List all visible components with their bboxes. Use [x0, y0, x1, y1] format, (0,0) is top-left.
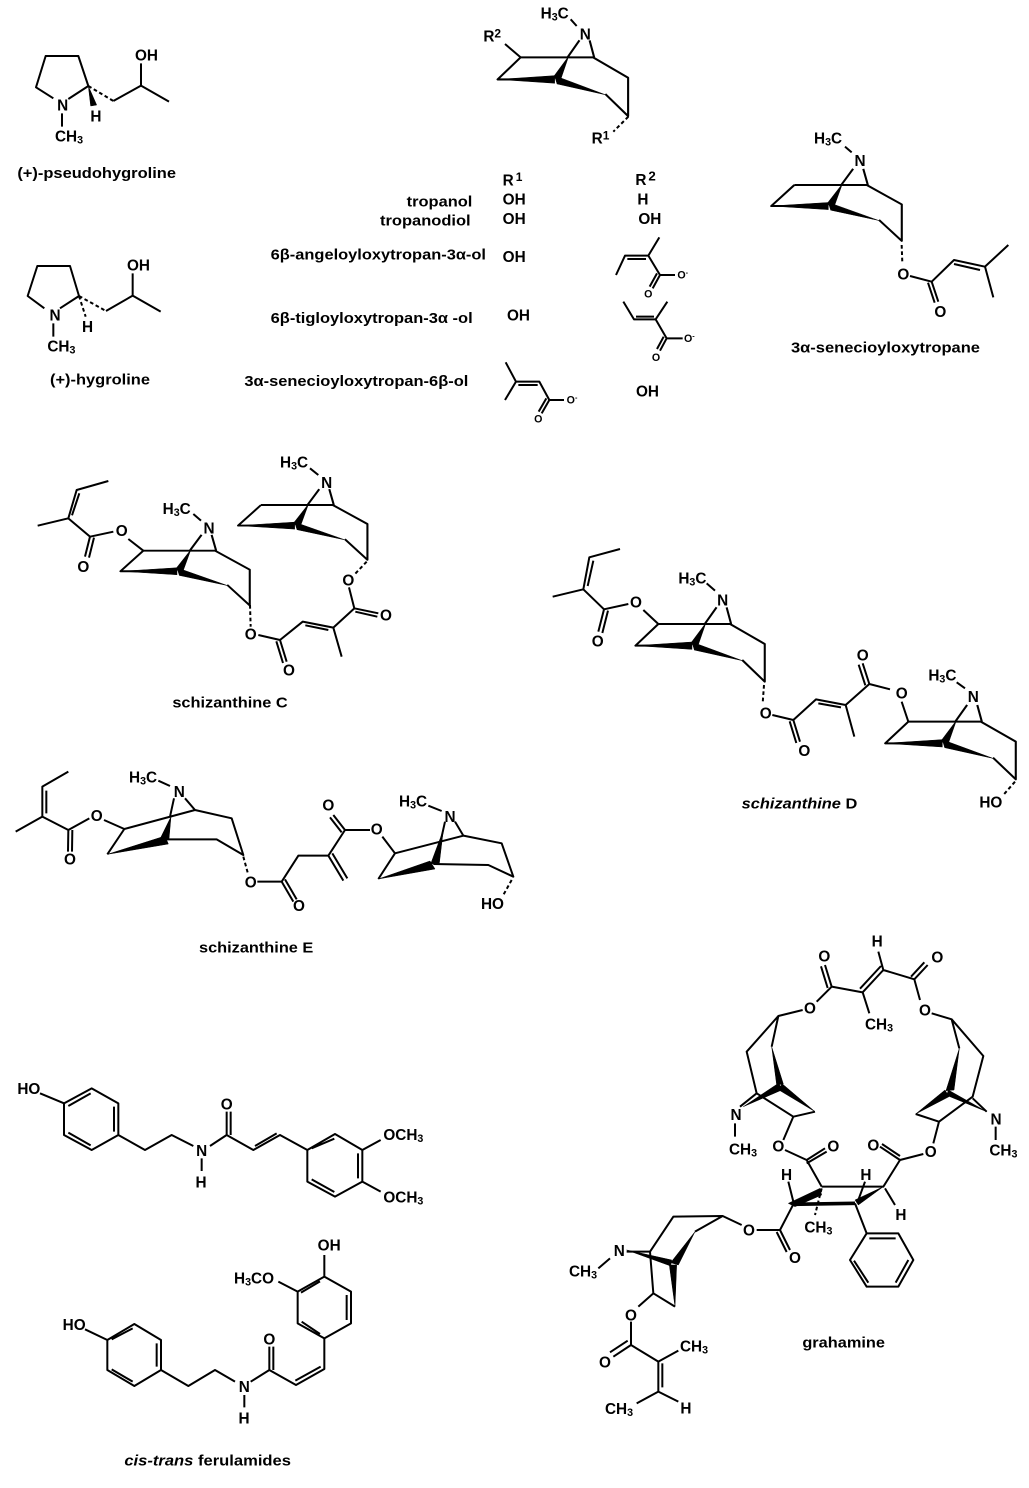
atom: H3C: 3	[939, 674, 945, 686]
atom: O: O	[599, 1355, 611, 1372]
atom labels	[64, 770, 504, 915]
oxygen anion: O	[677, 269, 686, 281]
atom labels	[77, 454, 392, 679]
row name: tropanol: tropanol	[407, 194, 472, 210]
atom: H3C: 3	[291, 460, 297, 472]
atom: H3C: H	[163, 501, 174, 518]
atom: H3C: C	[146, 770, 157, 787]
atom: H3C: C	[558, 5, 569, 22]
atom: O: O	[931, 950, 943, 967]
hashed bond	[899, 245, 905, 263]
atom: H: H	[680, 1401, 691, 1418]
bonds	[616, 237, 675, 288]
scaffold bonds	[498, 40, 628, 116]
atom: O: O	[925, 1144, 937, 1161]
wedge	[947, 1090, 987, 1112]
atom: CH3: 3	[627, 1407, 633, 1419]
bonds	[85, 1255, 351, 1407]
atom: H3C: H	[129, 770, 140, 787]
oxygen anion: -	[692, 332, 695, 341]
atom: O: O	[380, 607, 392, 624]
cell: OH: OH	[503, 191, 526, 208]
atom: O: O	[221, 1097, 233, 1114]
atom: O: O	[804, 1001, 816, 1018]
atom: O: O	[789, 1250, 801, 1267]
wedge	[627, 1250, 672, 1266]
carbonyl oxygen: O	[652, 352, 660, 364]
atom: N: N	[614, 1243, 625, 1260]
atom: H3C: C	[831, 130, 842, 147]
atom: CH3: 3	[702, 1345, 708, 1357]
carbonyl oxygen: O	[644, 289, 652, 301]
atom: CH3: CH	[989, 1142, 1011, 1159]
atom: H3C: 3	[174, 507, 180, 519]
bonds	[36, 56, 169, 127]
bonds	[598, 952, 996, 1403]
atom: N: N	[196, 1143, 207, 1160]
R2 bond	[505, 19, 577, 57]
atom: OH: OH	[127, 258, 150, 275]
atom: H3C: C	[297, 454, 308, 471]
atom: ester O: O	[897, 266, 909, 283]
name: pseudohygroline: (+)-pseudohygroline	[17, 166, 176, 182]
cell: OH: OH	[636, 384, 659, 401]
table acyl groups	[505, 237, 695, 426]
atom: O: O	[293, 898, 305, 915]
atom: H3C: H	[280, 454, 291, 471]
oxygen anion: O	[684, 333, 692, 345]
atom: carbonyl O: O	[934, 304, 946, 321]
hashed bond	[815, 1188, 822, 1215]
atom: R1: 1	[603, 128, 610, 142]
atom: O: O	[322, 797, 334, 814]
row name: senecioyloxytropanol: 3α-senecioyloxytropan-6β-ol	[244, 374, 468, 390]
atom: N: N	[203, 521, 215, 538]
atom: O: O	[896, 686, 908, 703]
atom labels	[17, 1081, 423, 1207]
atom: CH3: CH	[865, 1016, 887, 1033]
atom: H: H	[860, 1167, 871, 1184]
row name: angeloyloxytropanol: 6β-angeloyloxytropan-3α-ol	[271, 248, 486, 264]
oxygen anion: -	[686, 268, 689, 277]
angeloyl group	[616, 237, 689, 301]
carbonyl oxygen: O	[534, 414, 542, 426]
atom: H3C: H	[814, 130, 825, 147]
atom: OCH3: 3	[417, 1133, 423, 1145]
atom: O: O	[919, 1002, 931, 1019]
atom labels	[63, 1238, 341, 1427]
atom: O: O	[760, 706, 772, 723]
atom: O: O	[772, 1138, 784, 1155]
atom: N: N	[968, 689, 979, 706]
atom: N: N	[990, 1112, 1002, 1129]
bonds	[505, 362, 564, 413]
molecule: trans ferulamide	[17, 1081, 423, 1207]
atom: HO: HO	[481, 896, 504, 913]
atom: O: O	[827, 1138, 839, 1155]
atom: O: O	[371, 822, 383, 839]
atom: O: O	[630, 595, 642, 612]
atom: CH3: CH	[569, 1264, 591, 1281]
atom: O: O	[798, 743, 810, 760]
stereo wedge	[88, 86, 97, 106]
header: R1: R	[503, 173, 514, 190]
name: cis-trans ferulamides: cis-trans ferulamides	[124, 1454, 291, 1470]
cell: OH: OH	[503, 211, 526, 228]
stereo wedges	[627, 1047, 987, 1307]
atom: H3C: H	[541, 5, 552, 22]
atom: CH3: 3	[1011, 1148, 1017, 1160]
atom: N: N	[321, 475, 332, 492]
atom: N: N	[239, 1379, 250, 1396]
hashed bonds	[763, 685, 1015, 795]
atom: H3C: C	[695, 570, 706, 587]
atom: H: H	[872, 934, 883, 951]
atom: OCH3: OCH	[383, 1189, 417, 1206]
atom: H3C: H	[928, 668, 939, 685]
oxygen anion: -	[575, 393, 578, 402]
atom: H3C: C	[945, 668, 956, 685]
atom: OH: OH	[318, 1238, 341, 1255]
molecule: generic tropane scaffold	[483, 5, 628, 147]
tigloyl group	[623, 302, 695, 364]
atom: OH: OH	[135, 48, 158, 65]
atom: HO: HO	[63, 1317, 86, 1334]
atom: H3CO: CO	[251, 1270, 274, 1287]
table row names	[244, 194, 486, 390]
atom: O: O	[743, 1223, 755, 1240]
molecule: 3-alpha-senecioyloxytropane	[771, 130, 1008, 356]
oxygen anion: O	[567, 394, 575, 406]
atom: OCH3: OCH	[383, 1127, 417, 1144]
bonds	[16, 772, 513, 902]
wedge	[160, 817, 171, 839]
bonds	[845, 147, 1008, 303]
atom: R1: R	[592, 130, 603, 147]
atom: CH3: 3	[591, 1270, 597, 1282]
atom: O: O	[342, 572, 354, 589]
thick cyclobutane edge	[793, 1203, 855, 1204]
atom: O: O	[91, 808, 103, 825]
atom: N: N	[174, 784, 185, 801]
atom: N: N	[49, 307, 61, 324]
wedge	[788, 1188, 822, 1207]
atom: H: H	[238, 1410, 250, 1427]
atom: N: N	[717, 592, 728, 609]
atom: H: H	[90, 108, 101, 125]
header: R2: 2	[648, 168, 656, 183]
atom: CH3: CH	[47, 339, 69, 356]
atom: H: H	[895, 1207, 906, 1224]
wedge	[855, 1187, 883, 1205]
name: senecioyloxytropane: 3α-senecioyloxytropane	[791, 340, 980, 356]
wedge	[378, 861, 435, 879]
wedge	[669, 1265, 677, 1307]
wedge	[946, 1048, 959, 1091]
atom: H3C: C	[180, 501, 191, 518]
molecule: hygroline	[28, 258, 161, 389]
atom: O: O	[283, 662, 295, 679]
name: grahamine: grahamine	[802, 1335, 885, 1351]
atom: O: O	[592, 633, 604, 650]
row name: tigloyloxytropanol: 6β-tigloyloxytropan-3α -ol	[271, 311, 473, 327]
atom: CH3: CH	[605, 1401, 627, 1418]
atom: H3C: 3	[552, 11, 558, 23]
atom: H: H	[82, 319, 93, 336]
header: R1: 1	[516, 170, 523, 184]
hashed bonds	[243, 857, 512, 895]
atom: H: H	[195, 1174, 207, 1191]
header: R2: R	[635, 172, 646, 189]
atom: CH3: 3	[751, 1147, 757, 1159]
cell: OH: OH	[503, 249, 526, 266]
atom: N: N	[580, 27, 591, 44]
atom: CH3: 3	[826, 1226, 832, 1238]
atom: CH3: 3	[887, 1022, 893, 1034]
wedge	[431, 830, 443, 864]
stereo wedges	[107, 817, 443, 879]
atom: O: O	[64, 852, 76, 869]
atom: O: O	[116, 523, 128, 540]
wedge	[671, 1232, 695, 1265]
atom: H3C: 3	[140, 776, 146, 788]
bonds	[28, 266, 161, 337]
atom: H3C: H	[399, 794, 410, 811]
atom: N: N	[730, 1107, 742, 1124]
atom: CH3: CH	[729, 1141, 751, 1158]
atom: H3C: 3	[689, 576, 695, 588]
atom: R2: R	[483, 29, 494, 46]
wedge	[916, 1090, 949, 1114]
bonds	[553, 549, 965, 743]
R1 hashed bond	[613, 117, 628, 132]
atom: H: H	[781, 1167, 792, 1184]
atom: R2: 2	[494, 27, 501, 41]
hashed bonds	[79, 296, 106, 317]
molecule: grahamine	[569, 934, 1017, 1419]
row name: tropanodiol: tropanodiol	[380, 214, 471, 230]
cell: OH: OH	[638, 211, 661, 228]
atom: H3CO: H	[234, 1270, 245, 1287]
cell: H: H	[637, 191, 648, 208]
molecule: schizanthine C	[38, 454, 392, 711]
atom: CH3: CH	[804, 1220, 826, 1237]
atom: HO: HO	[17, 1081, 40, 1098]
atom: O: O	[245, 875, 257, 892]
atom: O: O	[818, 948, 830, 965]
atom: H3C: C	[416, 794, 427, 811]
bonds	[40, 1088, 381, 1197]
tropane scaffold	[771, 169, 902, 241]
name: schizanthine C: schizanthine C	[172, 695, 288, 711]
wedge	[107, 836, 168, 854]
atom: O: O	[857, 647, 869, 664]
left tropane	[120, 535, 250, 605]
atom: N: N	[444, 809, 456, 826]
molecule: schizanthine D	[553, 549, 1016, 812]
atom labels	[592, 570, 1002, 812]
wedge	[780, 1083, 815, 1112]
atom: CH3: 3	[69, 345, 75, 357]
atom: N: N	[57, 97, 68, 114]
atom: CH3: CH	[55, 128, 77, 145]
wedge	[772, 1047, 783, 1085]
name: hygroline: (+)-hygroline	[50, 373, 150, 389]
atom: H3C: 3	[825, 136, 831, 148]
bonds	[38, 468, 378, 663]
wedge	[743, 1083, 783, 1107]
atom: O: O	[867, 1137, 879, 1154]
atom: O: O	[263, 1332, 275, 1349]
dashed bond	[88, 86, 113, 101]
right tropane	[885, 705, 1016, 779]
bonds	[623, 302, 683, 351]
cell: OH: OH	[507, 308, 530, 325]
atom: N: N	[854, 153, 866, 170]
atom: H3C: H	[678, 570, 689, 587]
atom: HO: HO	[979, 795, 1002, 812]
atom: CH3: CH	[680, 1339, 702, 1356]
molecule: pseudohygroline	[17, 48, 176, 182]
right tropane	[238, 489, 367, 560]
left tropane	[635, 607, 765, 682]
molecule: schizanthine E	[16, 770, 513, 956]
atom: OCH3: 3	[417, 1195, 423, 1207]
atom: CH3: 3	[77, 134, 83, 146]
atom: O: O	[625, 1307, 637, 1324]
hashed bonds	[250, 562, 367, 627]
name: schizanthine E: schizanthine E	[199, 940, 313, 956]
atom: O: O	[77, 559, 89, 576]
molecule: cis ferulamide	[63, 1238, 351, 1470]
atom labels	[569, 934, 1017, 1419]
name: schizanthine D: schizanthine D	[742, 796, 857, 812]
senecioyl group	[505, 362, 578, 426]
atom: H3C: 3	[410, 800, 416, 812]
table of substituents R1 and R2	[503, 168, 661, 401]
atom: H3CO: 3	[245, 1276, 251, 1288]
atom: O: O	[245, 626, 257, 643]
